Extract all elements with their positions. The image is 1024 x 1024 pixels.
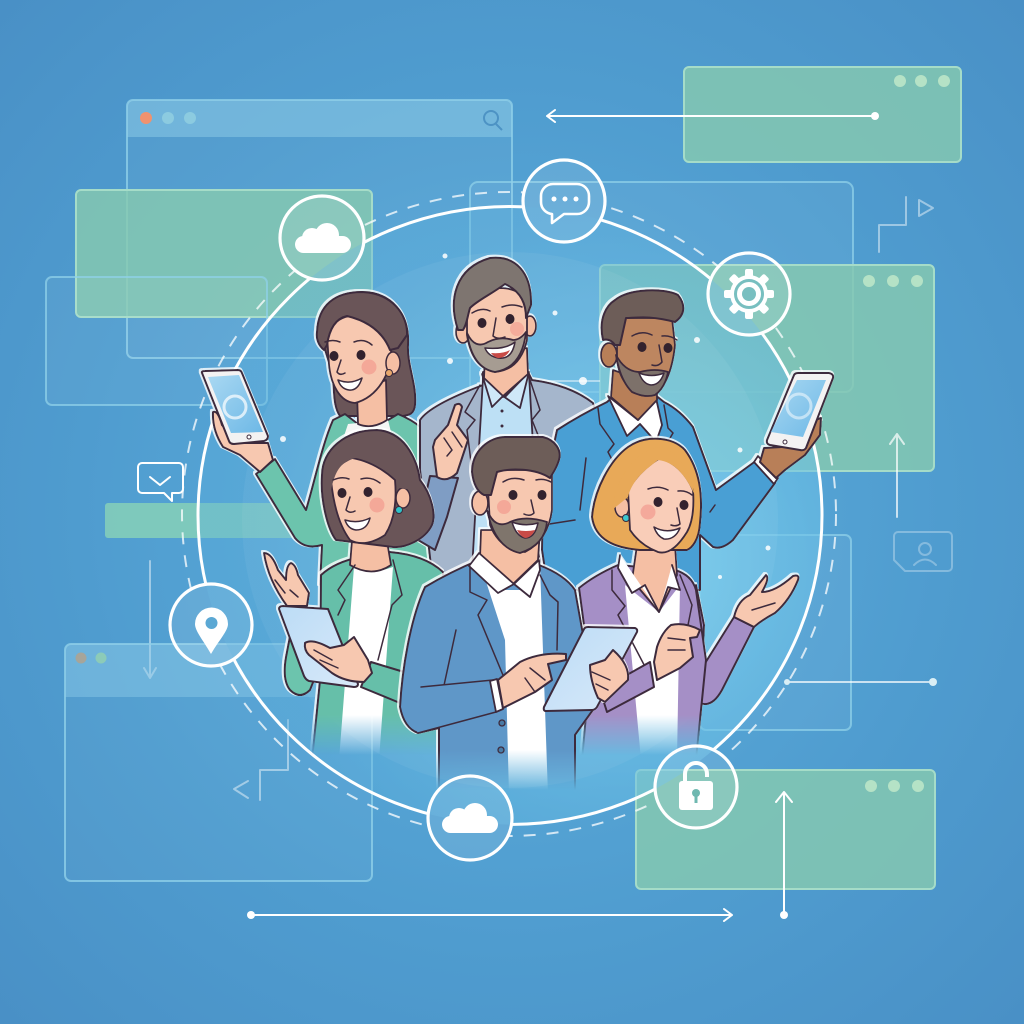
white top <box>339 567 393 760</box>
raised hand <box>734 575 798 627</box>
hand on tablet <box>305 637 372 682</box>
panel: left green block <box>76 190 372 317</box>
face <box>327 316 391 403</box>
ear and earring <box>396 488 410 514</box>
back arm <box>282 637 314 696</box>
facial features <box>472 305 524 358</box>
collar <box>618 555 680 612</box>
person: brown skin man with phone, back right <box>542 290 833 590</box>
person: blonde woman in purple, front right <box>579 439 798 760</box>
facial features <box>497 478 551 538</box>
ear <box>601 343 617 367</box>
hand <box>760 418 821 478</box>
jacket <box>312 552 447 760</box>
hair <box>472 437 560 495</box>
face <box>487 470 552 552</box>
hand <box>213 412 273 472</box>
central sphere <box>198 206 822 824</box>
icon: location pin node <box>170 584 252 666</box>
lapels <box>611 569 693 665</box>
grey jacket <box>420 372 606 575</box>
neck <box>632 545 677 612</box>
beard <box>487 510 547 553</box>
panel: top left browser window <box>127 100 512 358</box>
back hair <box>322 430 434 547</box>
main ring <box>198 206 822 824</box>
back hair <box>321 292 415 416</box>
panel: lower right green window <box>636 770 935 889</box>
facial features <box>640 487 692 539</box>
buttons <box>500 410 504 444</box>
neck <box>357 380 387 426</box>
hand near chest <box>654 624 700 680</box>
fringe <box>330 457 408 490</box>
arrow: left down <box>144 561 156 678</box>
sleeve <box>415 476 458 550</box>
face <box>331 458 396 543</box>
panel: left outline box <box>46 277 267 405</box>
hair <box>602 290 683 345</box>
collar <box>469 553 540 597</box>
icon: faint user card <box>894 532 952 571</box>
teal jacket and arm <box>256 414 440 585</box>
white top <box>344 420 392 436</box>
cuff <box>490 679 503 712</box>
white cuff <box>754 456 778 484</box>
ear <box>472 491 488 515</box>
icon: bottom cloud node <box>428 776 512 860</box>
pointing hand <box>498 654 566 708</box>
ears <box>456 316 536 343</box>
light blue shirt <box>472 374 540 570</box>
icon: gear node <box>708 253 790 335</box>
fringe <box>614 457 694 508</box>
buttons <box>498 720 505 753</box>
arrow: right up <box>890 434 904 517</box>
ear and earring <box>615 497 630 522</box>
arrow: top pointing left <box>547 110 879 122</box>
facial features <box>632 333 677 385</box>
raised hand <box>264 553 309 606</box>
hair <box>454 258 531 330</box>
phone <box>202 370 268 444</box>
lapels <box>543 405 715 525</box>
arrow: lower right up <box>776 792 792 919</box>
icon: cloud node <box>280 196 364 280</box>
panel: lower right outline box <box>700 535 851 730</box>
tablet <box>279 606 358 687</box>
neck <box>484 348 528 396</box>
white shirt <box>625 585 680 760</box>
person: woman with phone, back left <box>202 292 440 585</box>
white shirt <box>486 572 548 788</box>
face <box>467 288 527 372</box>
neck <box>348 542 392 572</box>
lapels <box>465 380 540 470</box>
forearm <box>402 680 496 733</box>
lapels <box>338 560 402 660</box>
connector: right dotted line <box>784 678 937 686</box>
sleeve <box>361 662 404 703</box>
shirt collar <box>608 396 662 442</box>
front hair <box>317 292 407 350</box>
icon: open lock node <box>655 746 737 828</box>
panel: right green window <box>600 265 934 471</box>
panel: left green bar <box>105 503 300 538</box>
lapels <box>443 567 558 690</box>
panel: top right green window <box>684 67 961 162</box>
dashed orbit <box>182 192 836 836</box>
neck <box>480 530 540 585</box>
person: grey suit man, back centre <box>415 258 606 575</box>
phone <box>767 373 833 450</box>
blue jacket and arm <box>542 394 775 590</box>
hand on tablet <box>590 650 628 702</box>
facial features <box>325 340 376 390</box>
tablet <box>544 627 637 711</box>
arm <box>690 585 754 704</box>
face <box>617 318 675 396</box>
arrow: upper right step <box>879 197 933 252</box>
arrow: bottom pointing right <box>247 909 732 921</box>
panel: lower left browser window <box>65 644 372 881</box>
icon: chat node <box>523 160 605 242</box>
arrow: lower left step <box>234 720 288 800</box>
beard <box>616 355 668 396</box>
icon: left message bubble <box>138 463 183 501</box>
person: bearded man in blue with tablet, front centre <box>400 437 637 795</box>
panel: right outline window <box>470 182 853 392</box>
jacket <box>400 560 600 795</box>
facial features <box>333 478 384 530</box>
ear and earring <box>386 352 400 376</box>
neck <box>611 370 657 420</box>
pointing hand <box>433 404 468 479</box>
person: woman in teal with tablet, front left <box>264 430 447 760</box>
sparkles <box>280 254 770 579</box>
collar <box>482 372 529 408</box>
face <box>628 458 693 553</box>
sleeve <box>600 662 654 712</box>
hair back <box>592 439 701 550</box>
beard <box>467 332 526 372</box>
jacket <box>579 565 706 760</box>
